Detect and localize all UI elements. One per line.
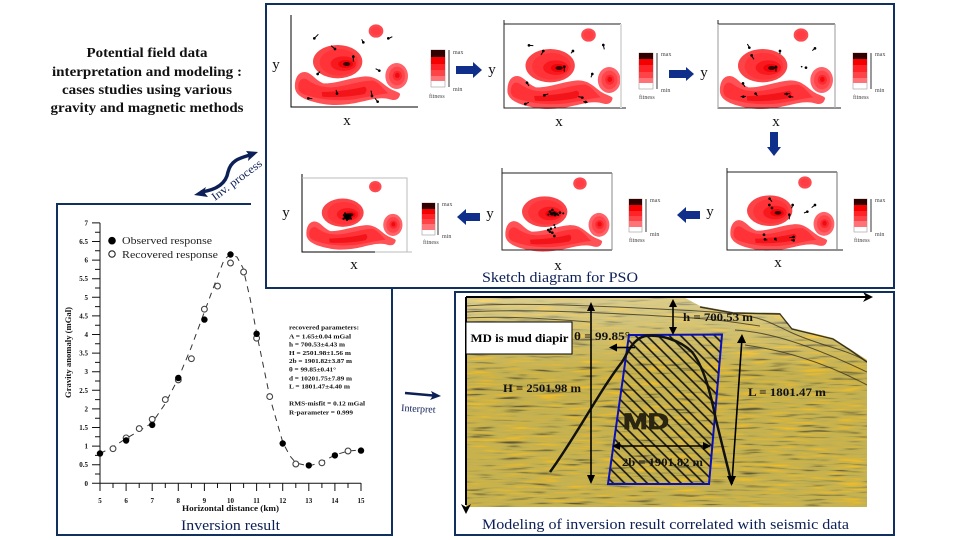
chart legend xyxy=(108,235,218,261)
x axis tick labels: 5 xyxy=(98,497,102,505)
y axis tick labels: 6.5 xyxy=(79,238,88,246)
y axis tick labels: 1 xyxy=(84,443,88,451)
arrow: step 5 to 6 xyxy=(457,209,480,225)
step 3 axis labels xyxy=(700,65,780,130)
panel: modeling of inversion result xyxy=(455,292,894,535)
label: inv. process: Inv. process xyxy=(210,157,265,203)
step 2 particle field xyxy=(504,20,626,109)
step 5 fitness legend xyxy=(629,198,660,244)
y axis tick labels: 5.5 xyxy=(79,275,88,283)
title: gravity and magnetic methods xyxy=(50,100,244,115)
arrow theta xyxy=(609,344,635,352)
seismic section xyxy=(466,297,867,507)
y axis tick labels: 3.5 xyxy=(79,350,88,358)
step 5 fitness legend: min xyxy=(650,232,659,238)
y axis tick labels: 6 xyxy=(84,257,88,265)
step 3 axis labels: x xyxy=(772,114,780,130)
recovered parameters: h = 700.53±4.43 m xyxy=(289,342,346,348)
x axis tick labels: 15 xyxy=(358,497,365,505)
step 2 fitness legend: max xyxy=(661,52,671,58)
x axis tick labels: 12 xyxy=(279,497,287,505)
step 6 axis labels: x xyxy=(350,257,358,273)
model parameter labels xyxy=(503,310,826,469)
step 5 axis labels: x xyxy=(554,258,562,274)
x axis tick labels: 7 xyxy=(150,497,154,505)
arrow: step 3 to 4 xyxy=(767,132,781,156)
arrow H xyxy=(587,302,595,484)
recovered parameters: L = 1801.47±4.40 m xyxy=(289,384,351,390)
y axis tick labels: 7 xyxy=(84,220,88,228)
recovered parameters: 2b = 1901.82±3.87 m xyxy=(289,358,353,365)
arrow L xyxy=(727,334,746,486)
arrow: interpret xyxy=(401,391,441,416)
panel: sketch diagram for PSO xyxy=(266,4,894,288)
step 6 axis labels: y xyxy=(282,205,290,221)
step 6 fitness legend: max xyxy=(442,202,452,208)
model parameter labels: L = 1801.47 m xyxy=(748,385,826,399)
step 2 fitness legend: min xyxy=(661,88,670,94)
recovered parameters: H = 2501.98±1.56 m xyxy=(289,350,352,357)
model parameter labels: H = 2501.98 m xyxy=(503,381,581,395)
step 1 fitness legend: min xyxy=(453,87,462,93)
step 5 axis labels: y xyxy=(486,206,494,222)
step 1 fitness legend: max xyxy=(453,50,463,56)
arrow: step 4 to 5 xyxy=(677,207,700,223)
y axis tick labels: 4.5 xyxy=(79,312,88,320)
step 1 fitness legend: fitness xyxy=(429,93,445,100)
step 1 axis labels xyxy=(272,57,351,129)
dashed fitted curve xyxy=(100,254,361,466)
step 1 particle field xyxy=(291,15,418,107)
step 4 fitness legend: min xyxy=(875,232,884,238)
x axis tick labels xyxy=(98,497,365,505)
arrow: step 1 to 2 xyxy=(456,62,482,78)
x axis tick labels: 10 xyxy=(227,497,234,505)
x axis tick labels: 9 xyxy=(203,497,207,505)
recovered parameters: R-parameter = 0.999 xyxy=(289,410,354,416)
model parameter labels: θ = 99.85° xyxy=(574,329,630,343)
step 3 fitness legend: min xyxy=(875,88,884,94)
x axis tick labels: 13 xyxy=(305,497,313,505)
recovered parameters xyxy=(289,324,365,416)
step 1 axis labels: y xyxy=(272,57,280,73)
caption: modeling: Modeling of inversion result correlated with seismic data xyxy=(482,517,850,533)
step 2 axis labels: x xyxy=(555,114,563,130)
step 1 fitness legend xyxy=(429,50,463,100)
recovered parameters: recovered parameters: xyxy=(289,324,359,332)
step 2 axis labels: y xyxy=(488,62,496,78)
callout: MD is mud diapir: MD is mud diapir xyxy=(470,331,569,345)
x axis tick labels: 14 xyxy=(331,497,339,505)
y axis tick labels: 2 xyxy=(84,405,88,413)
x axis tick labels: 11 xyxy=(253,497,260,505)
step 2 axis labels xyxy=(488,62,563,130)
step 4 axis labels: x xyxy=(774,255,782,271)
callout: MD is mud diapir xyxy=(466,322,572,354)
step 6 fitness legend: min xyxy=(442,234,451,240)
recovered parameters: θ = 99.85±0.41° xyxy=(289,366,336,374)
chart legend: Recovered response xyxy=(122,249,218,261)
arrow h xyxy=(669,299,677,335)
step 4 axis labels xyxy=(706,204,782,271)
top axis arrow xyxy=(466,292,873,302)
step 3 axis labels: y xyxy=(700,65,708,81)
y axis tick labels: 4 xyxy=(84,331,88,339)
step 3 fitness legend: fitness xyxy=(853,94,869,101)
arrow 2b xyxy=(612,442,711,450)
y axis tick labels: 0.5 xyxy=(79,461,88,469)
chart legend: Observed response xyxy=(122,235,212,247)
step 2 fitness legend xyxy=(639,52,671,101)
y axis tick labels: 0 xyxy=(84,480,88,488)
observed response points xyxy=(97,251,364,469)
recovered response points xyxy=(110,260,351,467)
axes and ticks xyxy=(92,223,361,491)
dome outline xyxy=(550,336,732,484)
step 5 axis labels xyxy=(486,206,562,274)
step 3 particle field xyxy=(718,20,841,109)
step 4 fitness legend: max xyxy=(875,198,885,204)
recovered parameters: d = 10201.75±7.89 m xyxy=(289,375,353,382)
step 1 axis labels: x xyxy=(343,113,351,129)
y axis tick labels: 2.5 xyxy=(79,387,88,395)
y axis title: Gravity anomaly (mGal) xyxy=(64,307,73,398)
step 5 fitness legend: fitness xyxy=(629,237,645,244)
step 6 axis labels xyxy=(282,205,358,273)
model parameter labels: 2b = 1901.82 m xyxy=(622,455,703,469)
title xyxy=(50,45,244,115)
x axis title: Horizontal distance (km) xyxy=(182,504,279,513)
label: MD: MD xyxy=(623,409,669,434)
step 6 particle field xyxy=(302,174,412,252)
step 5 particle field xyxy=(502,168,612,252)
y axis tick labels xyxy=(79,220,88,488)
label: interpret: Interpret xyxy=(401,403,436,416)
title: interpretation and modeling : xyxy=(52,64,242,79)
hatched prism MD xyxy=(608,334,722,484)
step 4 fitness legend: fitness xyxy=(854,237,870,244)
panel: inversion result xyxy=(57,204,392,535)
x axis tick labels: 6 xyxy=(124,497,128,505)
step 4 axis labels: y xyxy=(706,204,714,220)
arrow: step 2 to 3 xyxy=(669,67,694,81)
arrow: inversion process xyxy=(194,151,265,203)
step 2 fitness legend: fitness xyxy=(639,94,655,101)
step 4 particle field xyxy=(727,168,843,251)
y axis tick labels: 3 xyxy=(84,368,88,376)
step 6 fitness legend: fitness xyxy=(423,239,439,246)
recovered parameters: A = 1.65±0.04 mGal xyxy=(289,334,351,340)
caption: inversion result: Inversion result xyxy=(181,518,280,534)
step 4 fitness legend xyxy=(854,198,885,244)
title: Potential field data xyxy=(86,45,208,60)
step 3 fitness legend xyxy=(853,52,885,101)
left axis arrow xyxy=(461,297,471,514)
caption: sketch diagram for PSO: Sketch diagram for PSO xyxy=(482,270,638,286)
title: cases studies using various xyxy=(62,82,232,97)
y axis tick labels: 5 xyxy=(84,294,88,302)
recovered parameters: RMS-misfit = 0.12 mGal xyxy=(289,400,365,408)
gravity anomaly chart xyxy=(64,220,365,513)
step 3 fitness legend: max xyxy=(875,52,885,58)
step 5 fitness legend: max xyxy=(650,198,660,204)
x axis tick labels: 8 xyxy=(177,497,181,505)
step 6 fitness legend xyxy=(422,202,452,246)
model parameter labels: h = 700.53 m xyxy=(683,310,753,324)
y axis tick labels: 1.5 xyxy=(79,424,88,432)
